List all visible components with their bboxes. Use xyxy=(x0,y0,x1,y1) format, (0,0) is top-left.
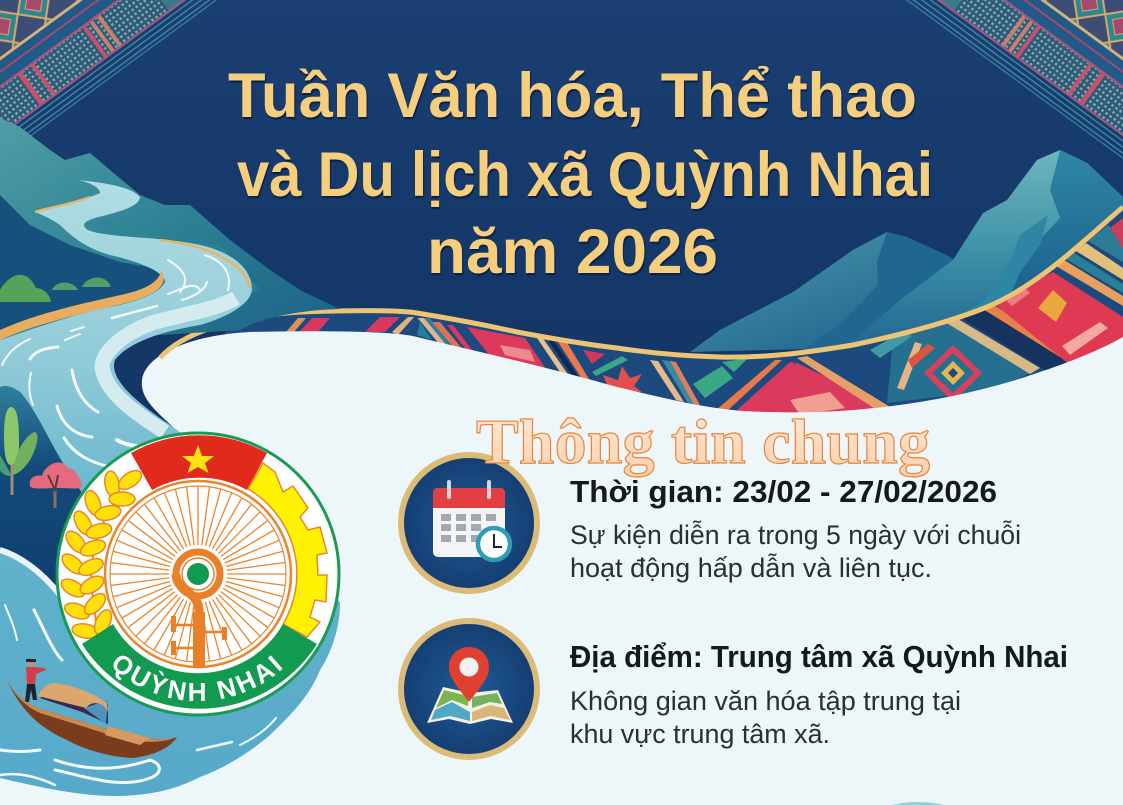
wheat ear xyxy=(58,467,145,642)
icon: green tree xyxy=(0,407,37,495)
red banner with star xyxy=(131,435,267,490)
icon: calendar with clock xyxy=(401,455,537,591)
block: location: Địa điểm: Trung tâm xã Quỳnh Nhai xyxy=(570,639,1068,674)
boatman xyxy=(25,658,46,702)
logo: Quỳnh Nhai emblem xyxy=(56,432,340,716)
left mountains xyxy=(0,118,340,345)
block: location xyxy=(570,639,1068,749)
title: và Du lịch xã Quỳnh Nhai xyxy=(237,140,933,210)
icon: pink tree xyxy=(30,463,82,508)
icon: map with location pin xyxy=(401,621,537,757)
block: location: Không gian văn hóa tập trung tại xyxy=(570,686,961,716)
textile band: top left corner xyxy=(0,0,439,251)
block: time: Sự kiện diễn ra trong 5 ngày với chuỗi xyxy=(570,520,1021,550)
section heading: Thông tin chung xyxy=(476,406,930,477)
right mountains xyxy=(690,150,1123,365)
block: time: Thời gian: 23/02 - 27/02/2026 xyxy=(570,474,997,509)
block: location: khu vực trung tâm xã. xyxy=(570,719,830,749)
wheel with spokes xyxy=(105,481,291,667)
river xyxy=(0,180,340,796)
gold wave line xyxy=(160,207,1123,358)
textile wave band xyxy=(225,210,1123,412)
title: Tuần Văn hóa, Thể thao xyxy=(228,61,917,131)
icon: green bushes xyxy=(0,275,111,302)
green ribbon xyxy=(82,624,317,709)
textile band: top right corner xyxy=(684,0,1123,251)
hill with trees xyxy=(0,386,100,595)
block: time: hoạt động hấp dẫn và liên tục. xyxy=(570,553,932,583)
white content panel xyxy=(0,331,1123,805)
next section arc at page bottom xyxy=(876,802,960,805)
title xyxy=(228,61,933,287)
title: năm 2026 xyxy=(427,217,718,287)
logo name on arc: QUỲNH NHAI xyxy=(114,655,283,701)
lute hub xyxy=(169,545,227,668)
block: time xyxy=(570,474,1021,583)
gear xyxy=(248,463,327,637)
navy header panel xyxy=(0,0,1123,440)
icon: boat with boatman xyxy=(6,658,177,758)
